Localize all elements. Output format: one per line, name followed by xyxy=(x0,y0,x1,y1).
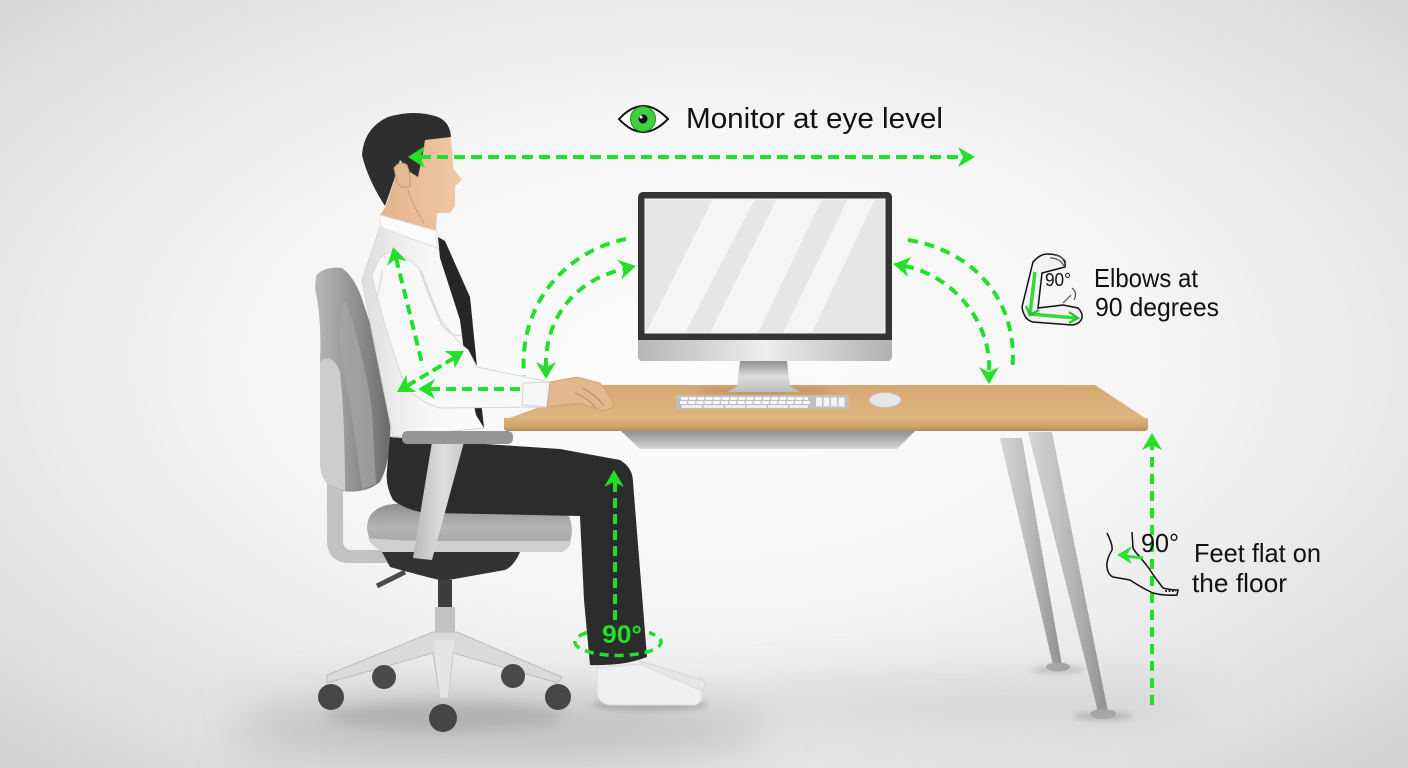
label text: Elbows at xyxy=(1094,263,1199,293)
forearm horizontal arrow xyxy=(418,379,521,399)
backrest lower pad xyxy=(320,359,345,491)
neck and face xyxy=(380,136,462,231)
seat underside xyxy=(382,552,520,581)
computer monitor xyxy=(638,192,892,392)
left outer arc xyxy=(524,239,626,376)
seated person xyxy=(362,113,705,705)
necktie xyxy=(438,237,484,428)
keyboard xyxy=(676,395,849,409)
elbows at 90 degrees label xyxy=(1022,254,1219,325)
chair lever xyxy=(377,572,405,586)
hand xyxy=(547,377,614,410)
armrest xyxy=(402,431,513,560)
hair xyxy=(362,113,451,206)
backrest stripe xyxy=(340,300,376,489)
label text: Monitor at eye level xyxy=(686,103,943,135)
right outer arc xyxy=(908,240,1013,372)
right inner arc arrow xyxy=(891,254,999,384)
monitor screen xyxy=(645,199,885,333)
monitor chin xyxy=(638,340,892,361)
sleeve fold xyxy=(376,270,462,336)
left inner arc arrow xyxy=(536,256,638,379)
knee arrow xyxy=(604,470,624,620)
chair back support arm xyxy=(327,470,390,563)
icon: eye xyxy=(619,106,668,132)
elbows at 90 degrees label: 90 degrees xyxy=(1095,292,1219,322)
mouse xyxy=(869,392,901,408)
neck crease xyxy=(408,190,424,223)
seat cushion xyxy=(367,503,572,552)
icon: flexed arm xyxy=(1022,254,1082,325)
under-desk panel xyxy=(620,430,916,449)
finger lines xyxy=(575,388,604,408)
monitor stand xyxy=(728,361,800,392)
feet flat on the floor label xyxy=(1107,528,1321,598)
90 degree text: 90° xyxy=(1141,528,1179,558)
arm and hand xyxy=(372,252,614,410)
chair base and casters xyxy=(318,632,571,732)
desk top xyxy=(504,385,1148,420)
desk front edge xyxy=(504,418,1148,431)
icon: foot xyxy=(1107,532,1178,595)
ankle 90 degree marker xyxy=(575,621,661,655)
chair backrest shell xyxy=(315,268,390,492)
screen reflections xyxy=(646,199,875,333)
shirt torso xyxy=(362,227,484,437)
feet flat on the floor label: the floor xyxy=(1192,568,1287,598)
eye level arrow xyxy=(408,146,975,168)
collar xyxy=(380,215,437,248)
monitor shadow on desk xyxy=(694,388,834,394)
ear xyxy=(394,163,410,187)
monitor bezel xyxy=(638,192,892,361)
ankle 90 degree marker: 90° xyxy=(602,621,642,649)
floor shadows xyxy=(230,666,1210,764)
desk xyxy=(504,385,1148,719)
desk legs xyxy=(1000,438,1062,665)
gas lift xyxy=(438,580,452,608)
upper arm arrow xyxy=(383,245,423,367)
cuff xyxy=(522,382,551,407)
desk height arrow xyxy=(1142,433,1162,705)
icon: flexed arm: 90° xyxy=(1045,270,1071,290)
label text: Feet flat on xyxy=(1194,538,1321,568)
socks xyxy=(597,661,705,705)
forearm diagonal arrow xyxy=(392,342,469,401)
shirt sleeve xyxy=(372,252,550,408)
trousers xyxy=(387,437,647,665)
office chair xyxy=(315,268,572,732)
monitor at eye level label xyxy=(619,103,943,135)
